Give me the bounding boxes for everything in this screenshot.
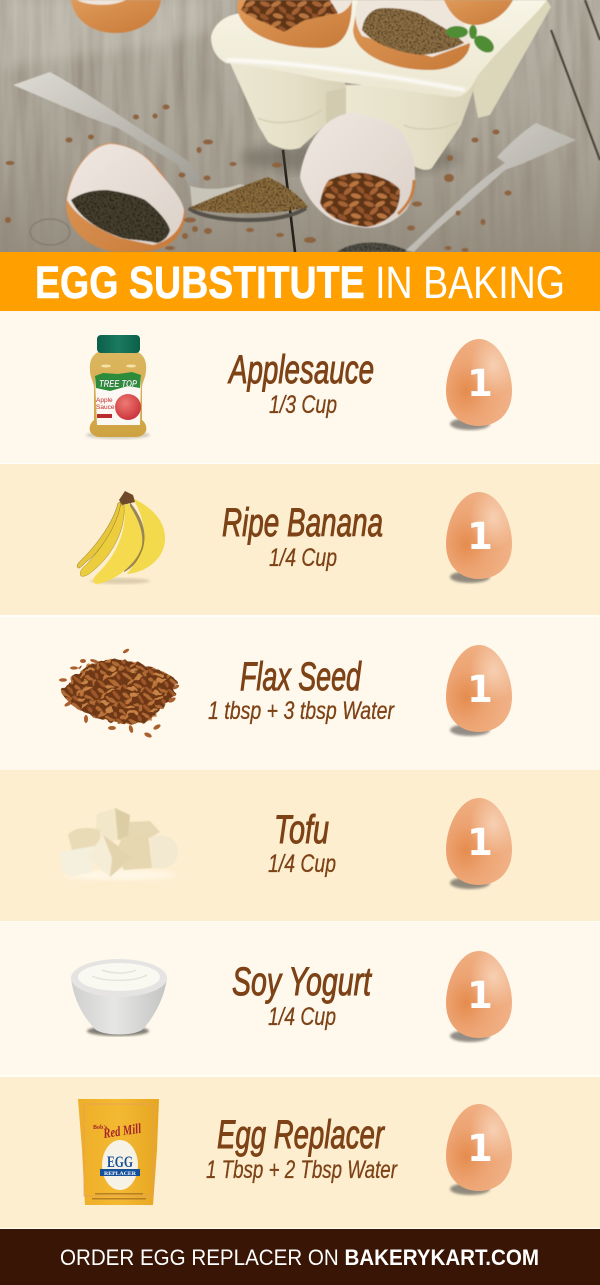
egg count badge: 1: [467, 974, 493, 1017]
amount: 1 tbsp + 2 tbsp water: 1 Tbsp + 2 Tbsp Water: [206, 1156, 398, 1184]
egg count badge: 1: [467, 362, 493, 405]
amount: 1/4 cup: 1/4 Cup: [269, 544, 337, 572]
wooden table: [0, 0, 600, 252]
icon: applesauce jar: [86, 335, 150, 439]
icon: egg replacer bag: [78, 1099, 159, 1205]
icon: yogurt bowl: [71, 959, 167, 1036]
egg count badge: [446, 645, 512, 736]
footer call to action: ORDER EGG REPLACER ON BAKERYKART.COM: [60, 1245, 539, 1270]
right spoon: [337, 123, 576, 252]
middle egg shell with flax: [300, 113, 415, 228]
icon: egg replacer bag: Red Mill: [102, 1122, 142, 1142]
name: egg replacer: Egg Replacer: [217, 1113, 385, 1157]
amount: 1/3 cup: 1/3 Cup: [269, 391, 337, 419]
egg count badge: 1: [467, 821, 493, 864]
name: soy yogurt: Soy Yogurt: [232, 960, 372, 1004]
row: egg replacer: [0, 1077, 600, 1228]
title banner: [0, 252, 600, 311]
icon: applesauce jar: Apple: [96, 397, 113, 404]
name: flax seed: Flax Seed: [240, 655, 362, 699]
title text: EGG SUBSTITUTE IN BAKING: [35, 257, 565, 308]
amount: 1 tbsp + 3 tbsp water: 1 tbsp + 3 tbsp Water: [208, 697, 395, 725]
egg count badge: 1: [467, 1127, 493, 1170]
row: applesauce: [0, 311, 600, 463]
row: soy yogurt: [0, 922, 600, 1075]
name: ripe banana: Ripe Banana: [222, 501, 383, 545]
icon: applesauce jar: TREE TOP: [99, 379, 137, 390]
row: tofu: [0, 770, 600, 921]
amount: 1/4 cup: 1/4 Cup: [268, 1003, 336, 1031]
left egg shell with chia: [66, 143, 185, 252]
egg count badge: 1: [467, 668, 493, 711]
carton egg shell: back right: [444, 0, 513, 25]
icon: applesauce jar: Sauce: [96, 404, 115, 411]
egg count badge: [446, 339, 512, 430]
icon: egg replacer bag: Bob's: [93, 1125, 108, 1131]
icon: banana bunch: [77, 491, 165, 584]
footer bar: [0, 1229, 600, 1285]
top left egg shell: [71, 0, 161, 33]
row: flax seed: [0, 617, 600, 770]
egg count badge: [446, 951, 512, 1042]
carton egg shell: flax: [237, 0, 352, 48]
row: ripe banana: [0, 464, 600, 615]
name: tofu: Tofu: [274, 808, 329, 852]
carton egg shell: ground seed: [353, 0, 470, 70]
scattered seeds: [5, 104, 512, 252]
mint leaf: [446, 25, 497, 56]
hero photo: egg shells with seeds on wooden table: [0, 0, 600, 252]
egg count badge: [446, 492, 512, 583]
icon: egg replacer bag: EGG: [107, 1154, 133, 1171]
egg count badge: [446, 798, 512, 889]
icon: tofu cubes: [60, 808, 178, 880]
name: applesauce: Applesauce: [228, 348, 374, 392]
egg count badge: [446, 1104, 512, 1195]
amount: 1/4 cup: 1/4 Cup: [268, 850, 336, 878]
icon: egg replacer bag: REPLACER: [104, 1171, 137, 1177]
egg count badge: 1: [467, 515, 493, 558]
ceramic egg carton: [211, 0, 551, 170]
left spoon: [13, 72, 308, 220]
icon: flax seeds: [59, 648, 180, 739]
